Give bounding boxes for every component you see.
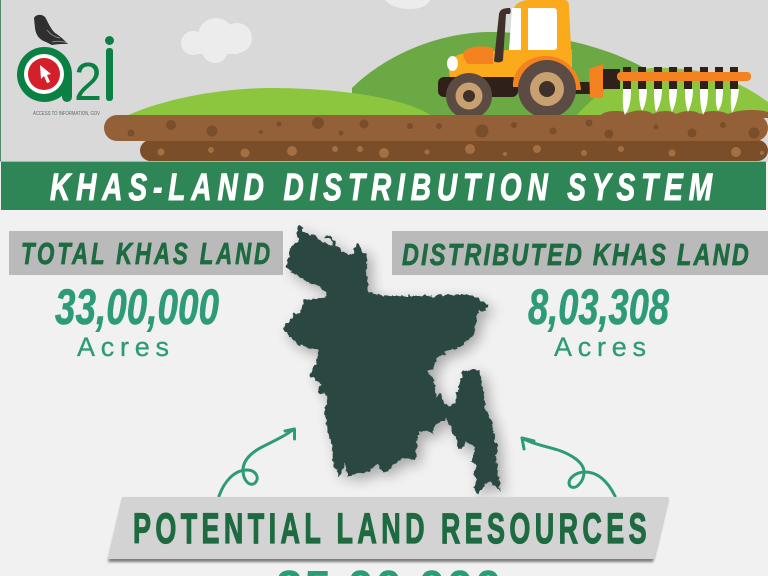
tractor hood <box>449 50 572 82</box>
arrow: right curl <box>522 438 615 496</box>
logo letter i <box>105 36 114 101</box>
hill front right <box>576 68 768 116</box>
tractor windows <box>509 8 521 50</box>
tractor front wheel <box>446 73 492 119</box>
tractor engine panel <box>463 46 493 64</box>
icon: cloud left <box>181 18 252 63</box>
tractor fender <box>513 56 581 90</box>
panel: distributed khas land <box>392 231 768 362</box>
heading bar <box>9 231 283 275</box>
tractor exhaust <box>494 8 511 62</box>
soil lower layer <box>140 140 768 161</box>
banner shape <box>108 497 669 559</box>
value: 33,00,000 <box>55 279 219 335</box>
plough hitch <box>589 64 603 98</box>
heading bar <box>392 231 768 275</box>
panel: total khas land <box>9 231 283 362</box>
soil upper layer <box>104 110 768 141</box>
text: a2i numeral: 2 <box>74 52 102 112</box>
arrow: left curl <box>219 429 294 496</box>
icon: red pointer circle <box>17 47 72 102</box>
logo tagline: ACCESS TO INFORMATION, GOV <box>33 111 101 117</box>
hill front left <box>126 88 432 116</box>
unit: Acres <box>77 332 174 362</box>
icon: cloud top <box>385 0 430 9</box>
plough teeth <box>623 67 739 115</box>
header farm scene <box>0 0 768 162</box>
title banner <box>0 161 766 210</box>
unit: Acres <box>554 332 651 362</box>
plough bar <box>617 72 751 81</box>
tractor chassis <box>438 77 518 97</box>
tractor headlight <box>447 56 458 71</box>
value: 8,03,308 <box>528 279 669 335</box>
icon: bird <box>34 15 68 45</box>
heading text: TOTAL KHAS LAND <box>21 236 273 271</box>
tractor cab <box>510 0 572 70</box>
map: Bangladesh <box>282 225 505 500</box>
hill back right <box>352 32 768 118</box>
panel: potential land resources <box>108 497 669 562</box>
icon: tractor body <box>438 0 620 119</box>
logo: a2i <box>17 15 114 117</box>
tractor rear wheel <box>518 60 576 118</box>
